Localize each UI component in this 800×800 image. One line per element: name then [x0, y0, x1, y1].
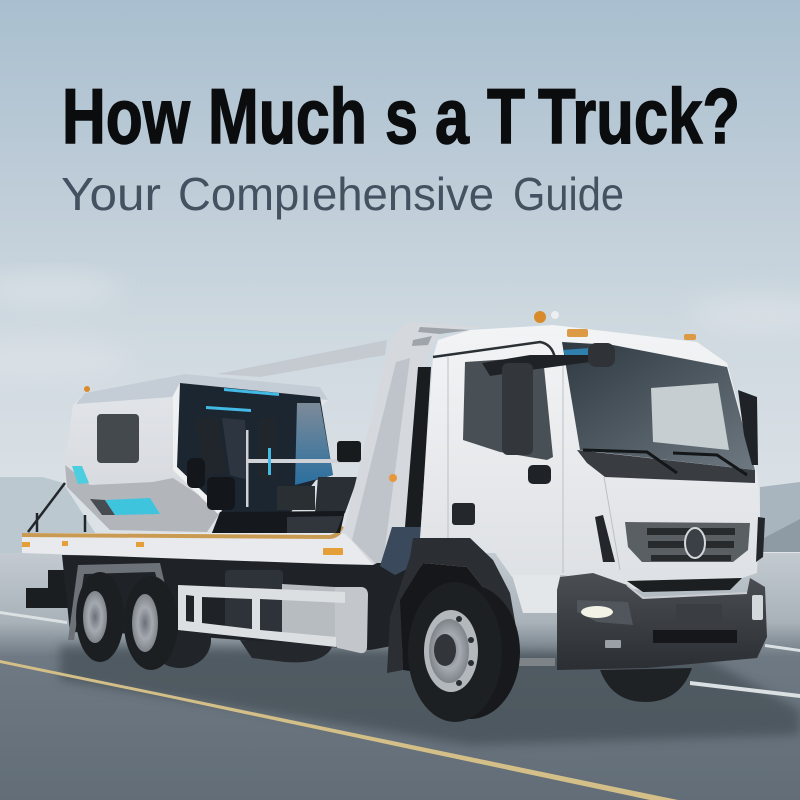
pod rear light	[72, 466, 89, 484]
title: Truck?	[538, 72, 740, 160]
boom frame	[340, 322, 487, 565]
middle wheels	[240, 640, 333, 662]
tail struts	[28, 483, 85, 532]
headlight	[577, 600, 633, 625]
fuel tank end	[335, 587, 368, 653]
right mirror	[738, 390, 758, 465]
background: sky	[0, 0, 800, 560]
subtitle: Guide	[513, 168, 624, 220]
subtitle: Compıehensive	[178, 168, 494, 220]
wheel well	[400, 563, 505, 680]
rear wheel 1	[76, 572, 124, 662]
side guard rails	[178, 585, 345, 647]
side window	[463, 357, 553, 460]
sun visor blue	[563, 348, 590, 363]
pod roof	[76, 374, 328, 404]
grille	[625, 522, 750, 562]
cab body	[420, 325, 760, 590]
pod floor	[212, 511, 345, 533]
background: clouds	[0, 274, 800, 380]
background: distant hills	[0, 477, 800, 556]
road: truck shadow	[60, 645, 800, 745]
bumper lip	[627, 585, 747, 598]
front bumper	[557, 573, 767, 670]
boom side face	[352, 358, 410, 563]
road: centre line	[0, 660, 678, 800]
cargo pod	[65, 374, 362, 533]
side vents	[595, 515, 765, 562]
cab rear wedge	[380, 527, 425, 575]
background: road	[0, 553, 800, 800]
lower bumper vent	[653, 630, 737, 643]
pod blue lights	[206, 388, 279, 475]
chassis	[62, 555, 425, 650]
pod window	[97, 414, 139, 463]
flatbed	[22, 533, 377, 565]
cab door seam	[433, 342, 555, 358]
title: Much	[208, 72, 367, 160]
pod right panel	[295, 403, 333, 485]
flatbed orange strip	[22, 526, 345, 539]
equipment box	[225, 570, 283, 634]
cab mirror	[482, 343, 615, 484]
pod seats	[187, 417, 315, 510]
front wheel	[408, 582, 520, 722]
roof lights	[84, 311, 696, 392]
door handle	[452, 503, 475, 525]
pod rail	[246, 430, 362, 507]
pod seat base	[287, 516, 343, 533]
grille emblem	[685, 528, 705, 558]
road: white lines	[0, 611, 800, 698]
wheel arch	[387, 538, 517, 673]
rear axle inner tyres	[149, 612, 211, 668]
boom upper bar	[217, 340, 387, 377]
windshield strip	[577, 450, 755, 483]
seat headrest	[337, 441, 361, 462]
right headlight	[752, 595, 763, 620]
subtitle: Your	[61, 168, 161, 220]
title: T	[487, 72, 525, 160]
cab under-door panel	[512, 575, 560, 613]
title: s	[385, 72, 418, 160]
cab step	[512, 658, 555, 666]
licence plate recess	[676, 604, 722, 628]
windshield reflection	[651, 383, 729, 450]
fuel tank	[282, 584, 335, 640]
pod front pillar	[173, 383, 222, 514]
cab panel seams	[448, 357, 620, 573]
headlight glow	[581, 606, 613, 618]
title	[62, 72, 740, 160]
subtitle	[61, 168, 624, 220]
rear steps	[26, 570, 75, 608]
pod bottom light glow	[105, 498, 160, 515]
front right wheel	[600, 668, 692, 702]
bed marker lights	[22, 541, 343, 555]
windshield	[562, 342, 755, 470]
pod lower band	[65, 465, 222, 532]
fog lamp	[605, 640, 621, 648]
truck	[22, 311, 767, 722]
pod bottom light	[90, 499, 115, 515]
pod far seat	[315, 477, 358, 513]
wipers	[583, 450, 747, 475]
boom top stripes	[412, 327, 470, 346]
pod shell	[65, 374, 328, 532]
rear fender	[68, 563, 176, 640]
title: a	[435, 72, 469, 160]
rear lamp	[389, 474, 397, 482]
title: How	[62, 72, 190, 160]
cab rear vent	[405, 367, 431, 527]
rear wheel 2	[124, 576, 178, 670]
bumper upper gap	[627, 578, 742, 592]
pod interior	[176, 383, 333, 533]
